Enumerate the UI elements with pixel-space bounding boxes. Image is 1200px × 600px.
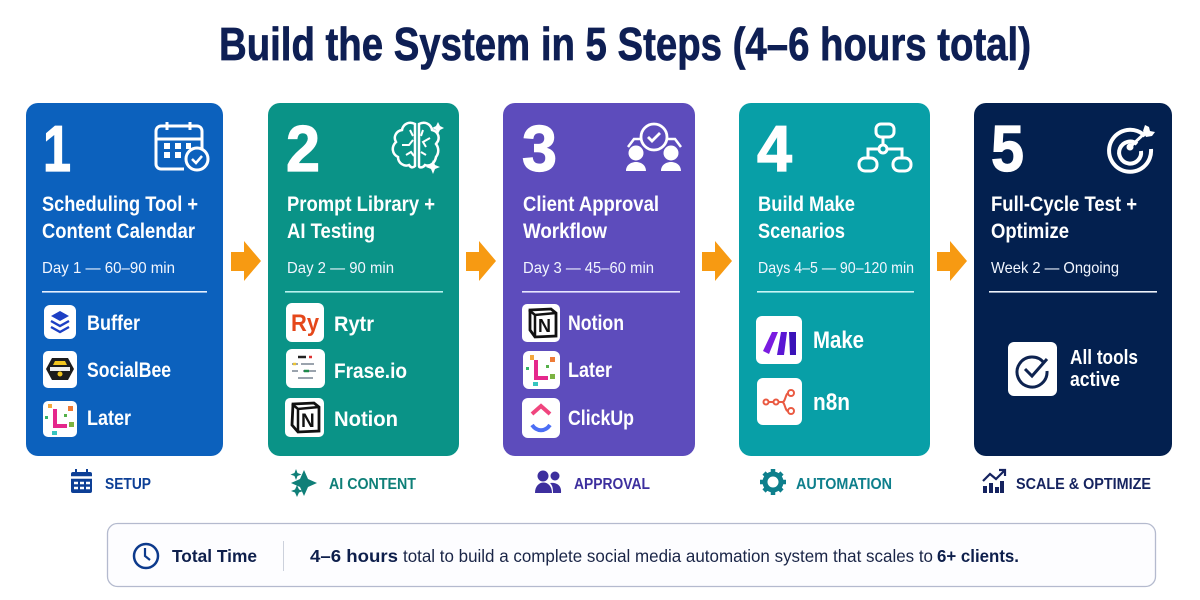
panel: step 2 prompt library — [268, 103, 459, 456]
panel: step 5 full-cycle test — [974, 103, 1172, 456]
icon: target with arrow — [1109, 125, 1155, 172]
step number 5: 5 — [991, 112, 1024, 185]
total time label: Total Time — [172, 546, 257, 566]
tool: Later: Later — [87, 406, 132, 430]
arrow 4 to 5 — [937, 241, 967, 281]
tool: Notion: Notion — [334, 407, 398, 431]
icon: workflow nodes — [859, 124, 911, 171]
summary text: 4–6 hours — [310, 546, 398, 566]
tool: Later — [523, 351, 613, 389]
tool: Rytr: Ry — [291, 310, 320, 337]
duration: Days 4–5 — 90–120 min — [758, 260, 914, 277]
heading: Client Approval — [523, 193, 659, 216]
tool: Buffer: Buffer — [87, 311, 141, 335]
duration: Day 3 — 45–60 min — [523, 260, 654, 277]
tool: n8n: n8n — [813, 389, 850, 416]
category: setup — [71, 469, 151, 493]
heading: Prompt Library + — [287, 193, 435, 216]
tool: Make — [756, 316, 864, 364]
heading: Build Make — [758, 193, 855, 216]
category: AI content — [290, 469, 416, 497]
icon: calendar with check — [156, 122, 208, 170]
tool: SocialBee: SocialBee — [87, 358, 171, 382]
tool: Frase.io — [286, 349, 407, 388]
summary text: total to build a complete social media automation system that scales to — [403, 546, 933, 566]
panel: step 1 scheduling tool — [26, 103, 223, 456]
tool: all tools active: All tools — [1070, 347, 1138, 369]
icon: brain with sparkles — [393, 122, 444, 174]
tool: ClickUp — [522, 398, 634, 438]
tool: Notion — [285, 398, 398, 437]
panel: step 2 prompt library: AI Testing — [287, 220, 375, 243]
category: scale and optimize — [983, 470, 1151, 493]
title: Build the System in 5 Steps (4–6 hours total) — [219, 18, 1031, 70]
tool: SocialBee — [43, 351, 171, 388]
callout: total time — [108, 524, 1156, 586]
tool: Notion: N — [538, 316, 551, 336]
category: setup: SETUP — [105, 476, 151, 493]
panel: step 5 full-cycle test: Optimize — [991, 220, 1069, 243]
step number 1: 1 — [43, 112, 71, 185]
step number 4: 4 — [757, 112, 792, 185]
tool: Later: Later — [568, 358, 613, 382]
tool: Notion: N — [301, 411, 315, 432]
icon: people with approval check — [626, 124, 681, 171]
step number 3: 3 — [522, 112, 557, 185]
icon: clock — [134, 544, 158, 568]
panel: step 4 build make scenarios — [739, 103, 930, 456]
panel: step 3 client approval — [503, 103, 695, 456]
duration: Day 1 — 60–90 min — [42, 260, 175, 277]
category: automation — [760, 469, 892, 495]
category: approval: APPROVAL — [574, 476, 650, 493]
tool: all tools active: active — [1070, 369, 1120, 391]
panel: step 4 build make scenarios: Scenarios — [758, 220, 845, 243]
tool: ClickUp: ClickUp — [568, 406, 634, 430]
category: AI content: AI CONTENT — [329, 476, 416, 493]
summary text: 6+ clients. — [937, 546, 1019, 566]
arrow 3 to 4 — [702, 241, 732, 281]
category: approval — [535, 470, 650, 493]
category: automation: AUTOMATION — [796, 476, 892, 493]
panel: step 3 client approval: Workflow — [523, 220, 608, 243]
tool: all tools active — [1008, 342, 1138, 396]
tool: Notion — [522, 304, 624, 342]
step number 2: 2 — [286, 112, 320, 185]
tool: Notion: Notion — [568, 311, 624, 335]
arrow 2 to 3 — [466, 241, 496, 281]
duration: Day 2 — 90 min — [287, 260, 394, 277]
duration: Week 2 — Ongoing — [991, 260, 1119, 277]
tool: n8n — [757, 378, 850, 425]
tool: Frase.io: Frase.io — [334, 359, 407, 383]
heading: Full-Cycle Test + — [991, 193, 1137, 216]
tool: Buffer — [44, 305, 141, 339]
arrow 1 to 2 — [231, 241, 261, 281]
tool: Rytr — [286, 303, 375, 342]
heading: Scheduling Tool + — [42, 193, 198, 216]
category: scale and optimize: SCALE & OPTIMIZE — [1016, 476, 1151, 493]
tool: Later — [43, 401, 132, 437]
tool: Make: Make — [813, 327, 864, 354]
tool: Rytr: Rytr — [334, 312, 375, 336]
panel: step 1 scheduling tool: Content Calendar — [42, 220, 195, 243]
